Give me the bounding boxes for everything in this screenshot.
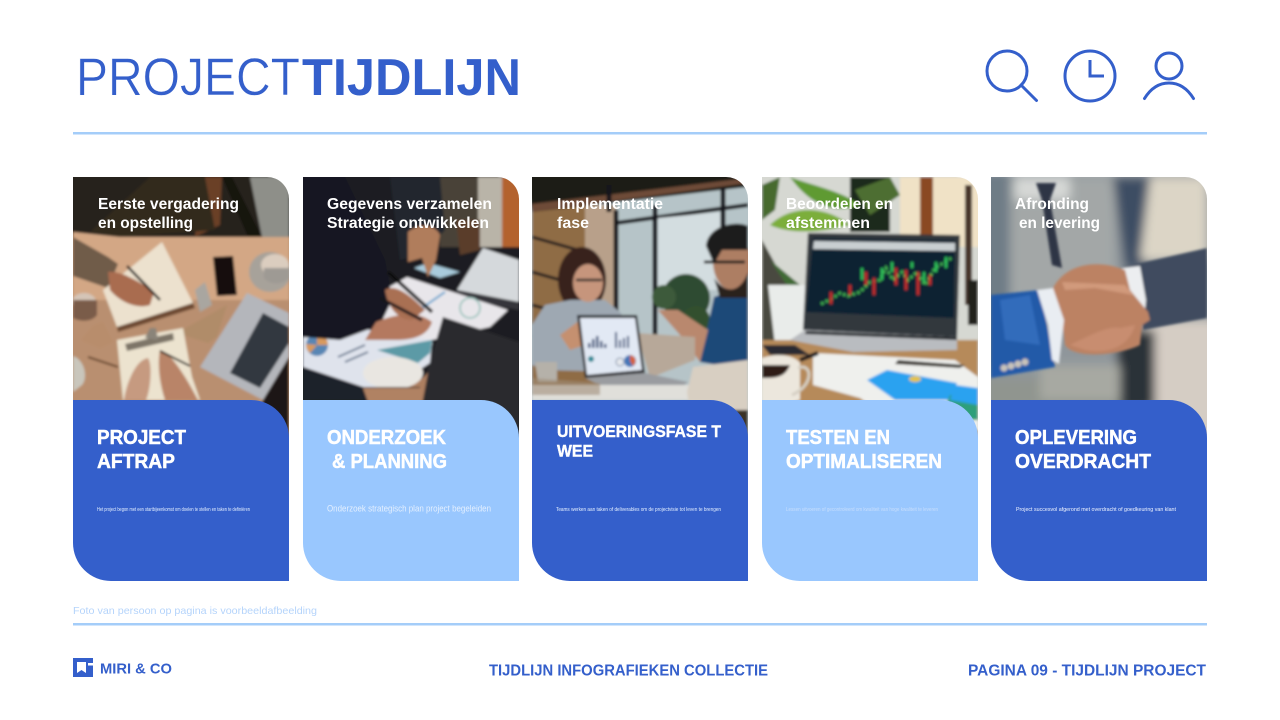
caption xyxy=(1015,196,1100,232)
logo xyxy=(73,658,172,678)
caption: en opstelling xyxy=(98,215,193,232)
footer page label: PAGINA 09 - TIJDLIJN PROJECT xyxy=(968,662,1207,680)
heading: PROJECT xyxy=(97,427,186,449)
caption: en levering xyxy=(1019,215,1100,232)
description: Onderzoek strategisch plan project begeleiden xyxy=(327,504,491,514)
heading xyxy=(786,427,942,473)
icon: logo mark xyxy=(73,658,93,677)
photo: laptop with trading chart xyxy=(762,177,978,438)
text panel xyxy=(991,400,1207,581)
heading: ONDERZOEK xyxy=(327,427,447,449)
icon: clock xyxy=(1065,51,1115,101)
caption: Implementatie xyxy=(557,196,663,213)
heading: AFTRAP xyxy=(97,451,175,473)
heading: & PLANNING xyxy=(332,451,447,473)
caption: Afronding xyxy=(1015,196,1089,213)
photo: colleagues discussing at a laptop xyxy=(532,177,748,438)
text panel xyxy=(303,400,519,581)
panel: card 4 testen en optimaliseren xyxy=(755,170,985,581)
brand name: MIRI & CO xyxy=(100,660,172,678)
panel: card 3 uitvoeringsfase twee xyxy=(525,170,755,581)
text panel xyxy=(762,400,978,581)
panel: card 2 onderzoek en planning xyxy=(295,170,527,581)
panel: card 5 oplevering overdracht xyxy=(991,177,1207,581)
heading xyxy=(97,427,186,473)
title: TIJDLIJN xyxy=(302,49,521,107)
text panel xyxy=(532,400,748,581)
caption xyxy=(786,196,893,232)
caption xyxy=(98,196,239,232)
caption xyxy=(327,196,492,232)
icon: search xyxy=(987,51,1036,100)
photo: team analysing documents xyxy=(303,177,519,438)
panel: card 1 project aftrap xyxy=(73,177,289,581)
caption: Eerste vergadering xyxy=(98,196,239,213)
heading xyxy=(327,427,447,473)
heading: OPTIMALISEREN xyxy=(786,451,942,473)
photo: handshake xyxy=(991,177,1207,436)
footnote: Foto van persoon op pagina is voorbeeldafbeelding xyxy=(73,605,317,617)
description: Project succesvol afgerond met overdracht of goedkeuring van klant xyxy=(1016,507,1176,513)
caption: Gegevens verzamelen xyxy=(327,196,492,213)
footer center title: TIJDLIJN INFOGRAFIEKEN COLLECTIE xyxy=(489,662,768,680)
description: Het project begon met een startbijeenkomst om doelen te stellen en taken te definiëren xyxy=(97,507,250,513)
caption: Beoordelen en xyxy=(786,196,893,213)
title: PROJECT xyxy=(76,48,300,107)
heading xyxy=(557,422,722,460)
icon: user xyxy=(1144,53,1194,98)
caption: Strategie ontwikkelen xyxy=(327,215,489,232)
description: Lessen uitvoeren of gecontroleerd om kwaliteit van hoge kwaliteit te leveren xyxy=(786,507,938,513)
title xyxy=(76,48,521,107)
caption: afstemmen xyxy=(786,215,870,232)
heading: UITVOERINGSFASE T xyxy=(557,422,722,441)
heading xyxy=(1015,427,1151,473)
heading: OVERDRACHT xyxy=(1015,451,1151,473)
heading: OPLEVERING xyxy=(1015,427,1137,449)
heading: TESTEN EN xyxy=(786,427,890,449)
caption xyxy=(557,196,663,232)
description: Teams werken aan taken of deliverables om de projectvisie tot leven te brengen xyxy=(556,507,721,513)
text panel xyxy=(73,400,289,581)
caption: fase xyxy=(557,215,589,232)
photo: desk from above xyxy=(73,177,289,438)
heading: WEE xyxy=(557,442,593,460)
